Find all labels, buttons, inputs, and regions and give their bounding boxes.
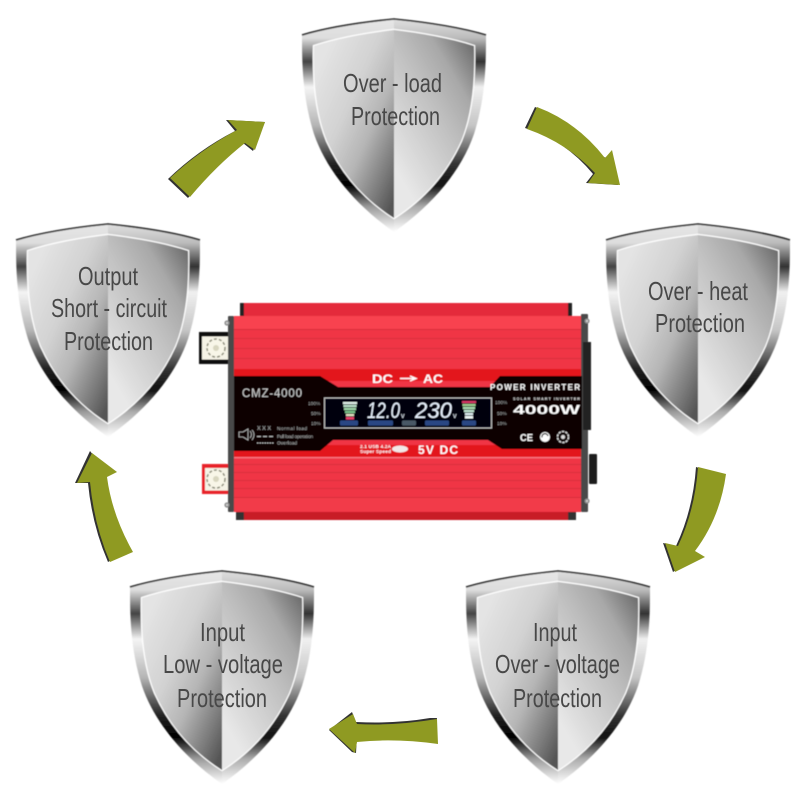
- brand: power inverter: POWER INVERTER: [490, 383, 580, 392]
- percent scale right: 10%: [497, 421, 507, 427]
- shield: output short-circuit protection: Protection: [64, 326, 153, 356]
- certification marks: [520, 432, 568, 444]
- shield: output short-circuit protection: [16, 224, 200, 437]
- shield: output short-circuit protection: Output: [78, 261, 139, 291]
- shield: input low-voltage protection: [130, 571, 314, 784]
- percent scale left: 100%: [308, 401, 321, 407]
- icon: speaker: [239, 429, 254, 440]
- LCD display: v: [453, 413, 457, 420]
- percent scale right: [495, 400, 508, 427]
- heatsink back edges: [236, 303, 576, 520]
- shield: over-heat protection: Protection: [655, 308, 745, 338]
- arrow: low-voltage shield to short-circuit shield: [75, 451, 133, 562]
- shield: input over-voltage protection: [466, 571, 650, 784]
- status indicators: [340, 420, 476, 426]
- left level bar: [343, 402, 357, 420]
- LCD display: v: [401, 413, 405, 420]
- black control panel: [234, 376, 582, 451]
- label: DC to AC: AC: [423, 372, 443, 386]
- arrow: output shield to over-load shield: [168, 120, 265, 198]
- shield: input over-voltage protection: Protection: [513, 683, 602, 713]
- legend: alarm states: [239, 426, 313, 446]
- legend: alarm states: Normal load: [277, 426, 307, 432]
- percent scale right: 50%: [497, 411, 507, 417]
- percent scale right: 100%: [495, 400, 508, 406]
- brand: power inverter: [490, 383, 580, 417]
- arrow: over-voltage shield to low-voltage shield: [329, 712, 438, 753]
- shield: over-heat protection: Over - heat: [648, 276, 749, 306]
- legend: alarm states: Full load operation: [277, 434, 313, 440]
- label: DC to AC: [372, 372, 443, 386]
- shield: over-load protection: Over - load: [343, 68, 442, 98]
- arrow: over-load shield to over-heat shield: [525, 107, 620, 185]
- shield: over-load protection: Protection: [351, 101, 440, 131]
- side plates: [224, 314, 597, 512]
- USB label: 2.1 USB 4.2A: [360, 444, 392, 450]
- shield: input over-voltage protection: Over - voltage: [495, 649, 620, 679]
- USB label: [360, 444, 408, 455]
- shield: input over-voltage protection: Input: [533, 617, 578, 647]
- certification marks: CE: [520, 432, 533, 444]
- red body with fins: [234, 316, 581, 512]
- output voltage reading: 230: [414, 398, 453, 423]
- LCD display: [324, 398, 492, 428]
- brand: power inverter: 4000W: [513, 403, 580, 417]
- shield: input low-voltage protection: Protection: [177, 683, 267, 713]
- arrow: over-heat shield to over-voltage shield: [663, 467, 726, 572]
- shield: output short-circuit protection: Short - circuit: [51, 293, 168, 323]
- power inverter device: [199, 303, 597, 520]
- label: 5V DC: 5V DC: [418, 443, 458, 457]
- terminal: negative: [199, 332, 231, 364]
- legend: alarm states: Overload: [277, 440, 297, 446]
- shield: input low-voltage protection: Input: [200, 617, 246, 647]
- label: DC to AC: DC: [372, 372, 393, 386]
- percent scale left: [308, 401, 321, 427]
- terminal: positive: [202, 464, 232, 494]
- shield: over-heat protection: [606, 224, 790, 437]
- input voltage reading: 12.0: [367, 398, 401, 423]
- percent scale left: 10%: [311, 421, 321, 427]
- legend: alarm states: XXX: [257, 426, 273, 432]
- USB label: Super Speed: [360, 449, 391, 455]
- right level bar: [462, 401, 476, 418]
- shield: over-load protection: [302, 19, 486, 232]
- percent scale left: 50%: [311, 411, 321, 417]
- label: model: CMZ-4000: [242, 388, 302, 400]
- shield: input low-voltage protection: Low - voltage: [163, 649, 283, 679]
- brand: power inverter: SOLAR SMART INVERTER: [513, 397, 580, 401]
